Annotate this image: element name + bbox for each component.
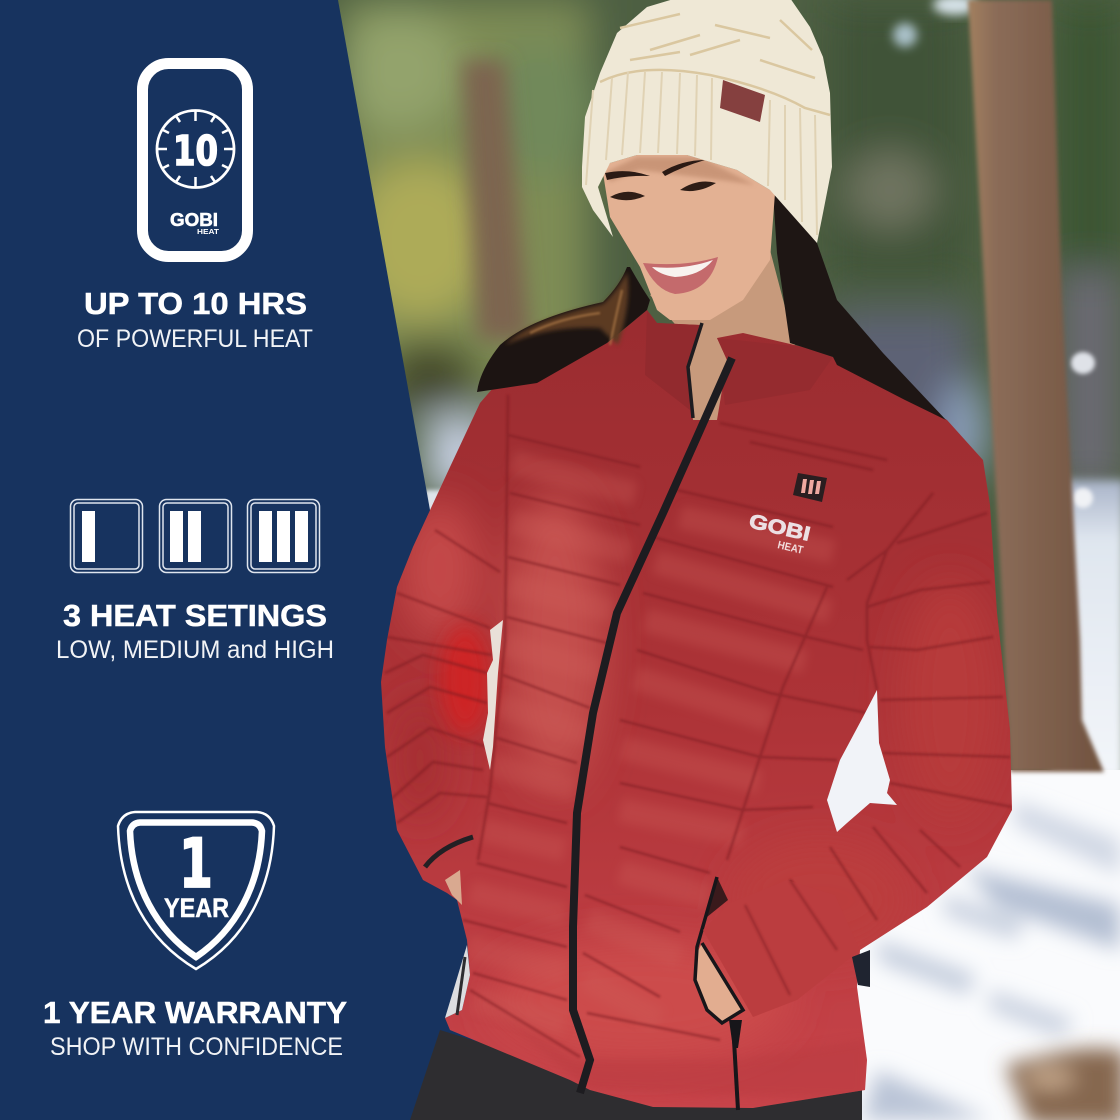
icon: 1 year shield — [118, 812, 274, 969]
subheading: of powerful heat: OF POWERFUL HEAT — [77, 325, 313, 353]
neck — [650, 250, 795, 430]
icon: phone battery with 10 hour clock: GOBI — [170, 210, 218, 230]
subheading: low medium high: LOW, MEDIUM and HIGH — [56, 636, 334, 664]
navy panel — [0, 0, 540, 1120]
icon: low setting — [70, 500, 142, 572]
jacket body — [381, 310, 1012, 1108]
bare wrist — [445, 870, 462, 905]
jacket shading and quilting — [385, 310, 1012, 1100]
heading: 3 heat settings: 3 HEAT SETINGS — [63, 598, 327, 633]
icon: 1 year shield: YEAR — [164, 893, 229, 923]
snow shadows — [830, 775, 1120, 1120]
feature: heat settings — [56, 500, 334, 664]
feature: warranty — [43, 812, 347, 1061]
jacket logo — [747, 510, 812, 557]
tree trunk, right — [968, 0, 1104, 772]
heat button — [793, 473, 827, 502]
icon: phone battery with 10 hour clock — [142, 64, 248, 256]
left cuff — [425, 837, 473, 867]
icon: phone battery with 10 hour clock: 10 — [173, 127, 218, 175]
jacket logo: GOBI — [747, 510, 812, 546]
pocket and hand — [457, 877, 743, 1110]
heading: up to 10 hrs: UP TO 10 HRS — [84, 286, 307, 321]
heading: 1 year warranty: 1 YEAR WARRANTY — [43, 995, 347, 1030]
face — [603, 155, 775, 320]
snow gap between left arm and torso — [483, 620, 503, 770]
snow wedge at left hem — [445, 945, 470, 1018]
pants — [410, 1030, 862, 1120]
beanie — [582, 0, 832, 243]
woman in red jacket — [381, 0, 1012, 1120]
icon: phone battery with 10 hour clock: HEAT — [197, 227, 219, 236]
jacket logo: HEAT — [776, 539, 805, 557]
dead leaves patch — [1005, 1048, 1120, 1120]
background tree trunk, left — [462, 60, 530, 340]
leather patch — [720, 80, 765, 122]
photo background: forest and snow — [330, 0, 1120, 1120]
collar shading — [645, 310, 700, 410]
icon: 1 year shield: 1 — [179, 825, 213, 904]
hair — [477, 193, 946, 420]
eyes and brows — [605, 160, 716, 200]
feature: battery life — [77, 64, 313, 353]
icon: high setting — [248, 500, 320, 572]
snow gap between right arm and torso — [827, 690, 897, 832]
icon: medium setting — [160, 500, 232, 572]
zipper — [573, 358, 732, 1093]
hem tag — [852, 950, 870, 987]
smile — [643, 257, 718, 294]
forearm cuff on sleeve — [703, 880, 860, 1017]
subheading: shop with confidence: SHOP WITH CONFIDENCE — [50, 1033, 343, 1061]
